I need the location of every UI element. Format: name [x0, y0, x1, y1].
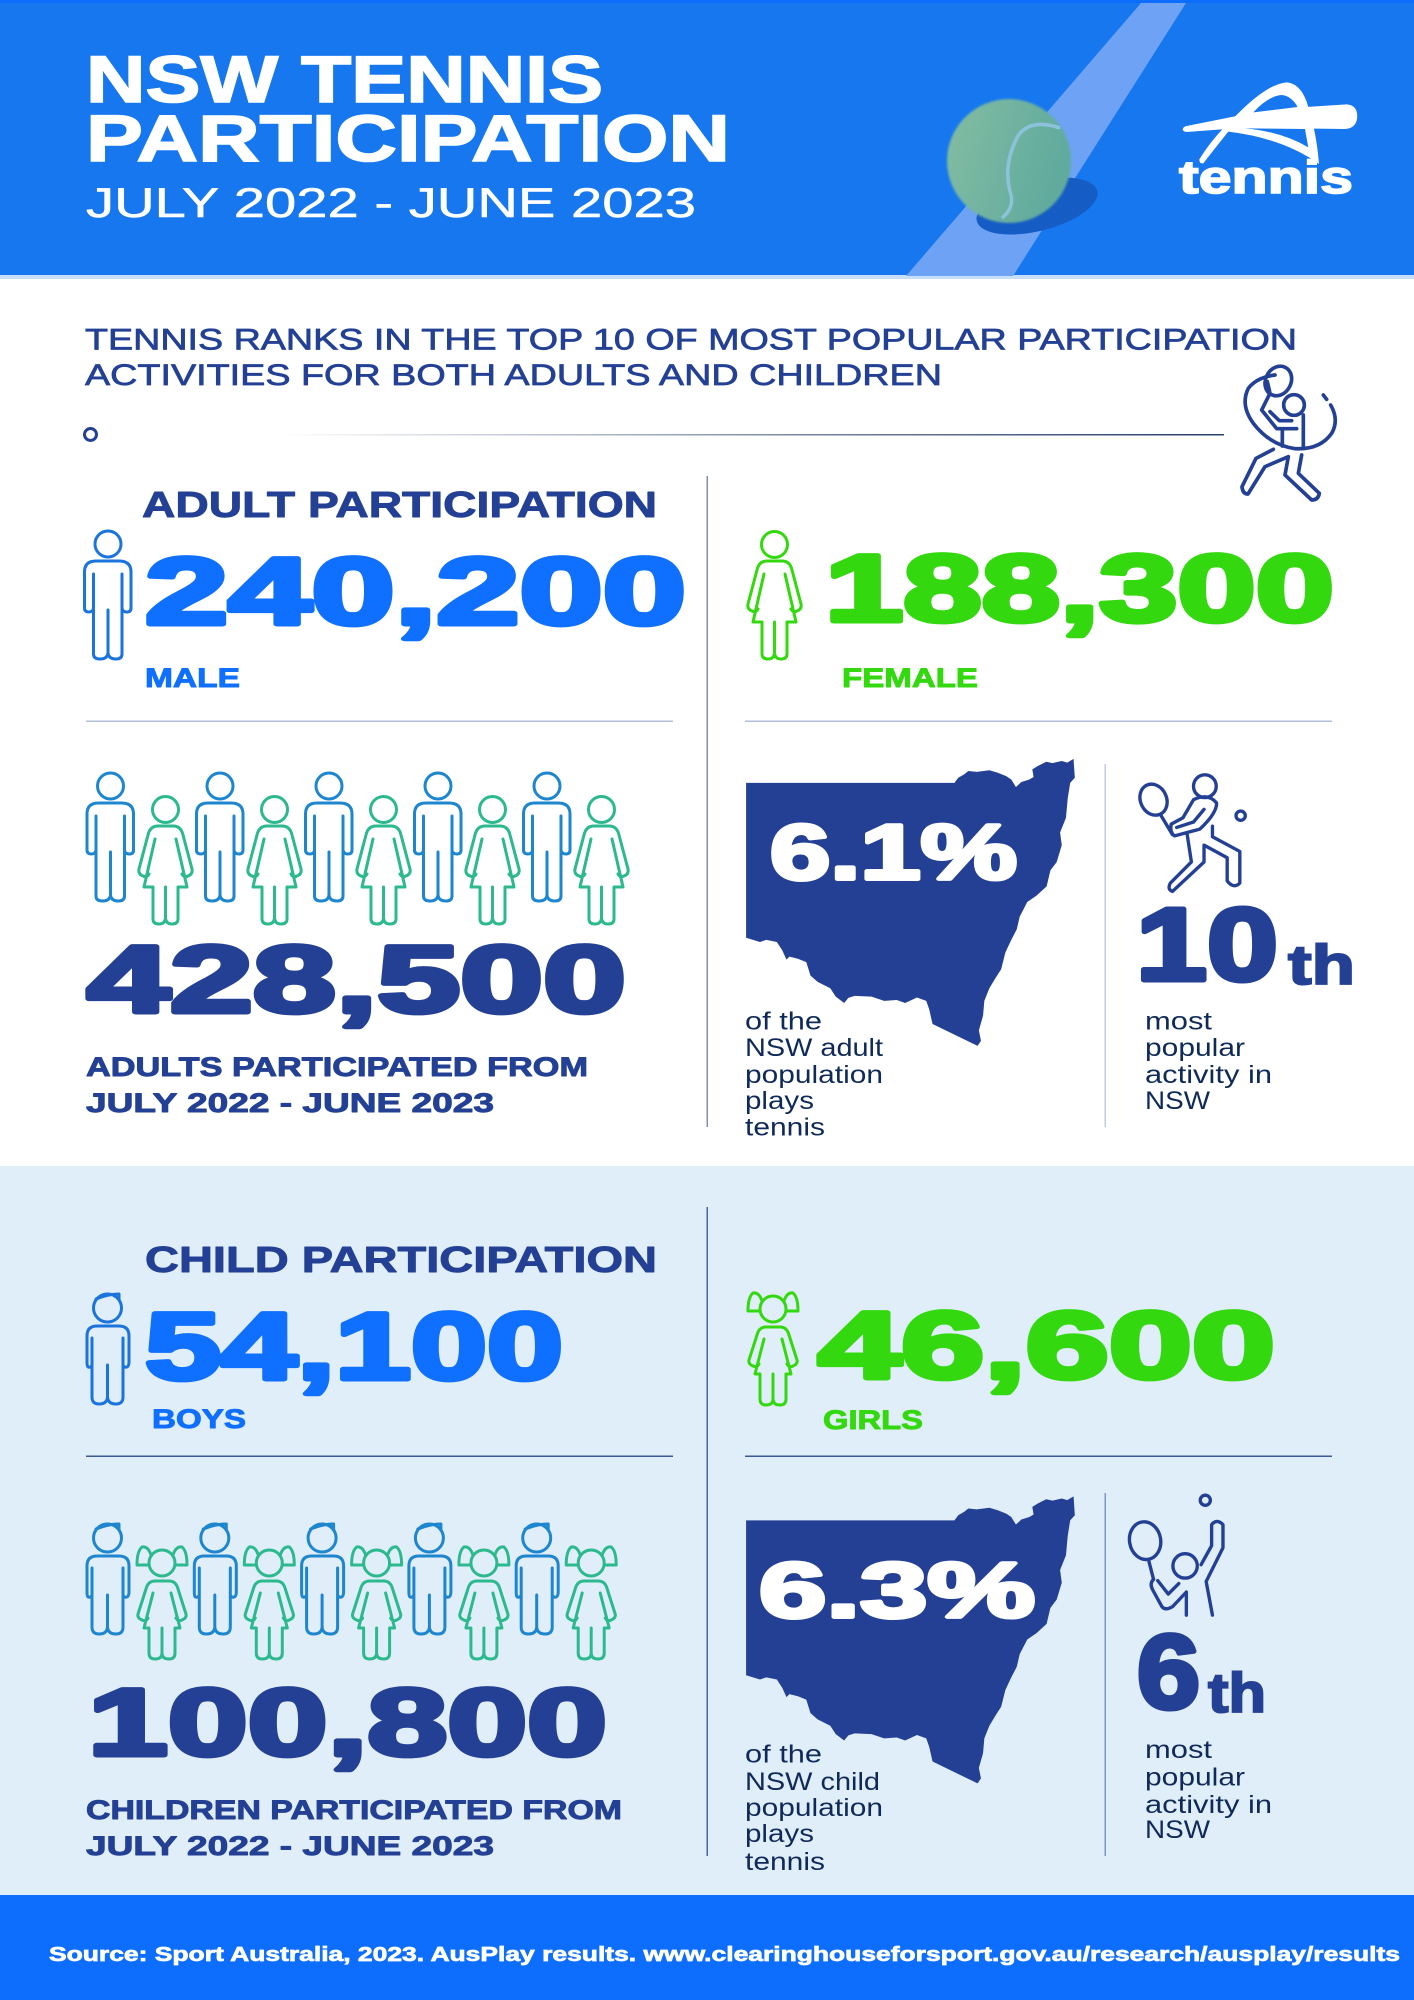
rank text: NSW — [1145, 1816, 1210, 1844]
footer — [0, 1895, 1414, 2000]
rank: 6th — [1137, 1614, 1266, 1731]
source line: Source: Sport Australia, 2023. AusPlay results. www.clearinghouseforsport.gov.au/research/ausplay/results — [49, 1944, 1400, 1966]
map: NSW child share — [746, 1496, 1075, 1783]
children caption — [86, 1795, 622, 1861]
heading: CHILD PARTICIPATION — [145, 1239, 657, 1280]
rank text — [1145, 1008, 1272, 1115]
ball shadow — [971, 167, 1103, 245]
icon: boy — [87, 1294, 129, 1404]
girls count: 46,600 — [818, 1293, 1275, 1399]
icon row: adults — [87, 773, 628, 924]
title: NSW TENNIS — [86, 42, 603, 116]
rank text: popular — [1145, 1764, 1245, 1792]
child share text: population — [745, 1794, 883, 1822]
rank: 10th: th — [1288, 933, 1355, 996]
rank text — [1145, 1736, 1272, 1844]
title: PARTICIPATION — [86, 101, 730, 175]
rank: 10th: 10 — [1136, 887, 1278, 1002]
male count: 240,200 — [145, 539, 686, 645]
adult share text — [745, 1008, 883, 1142]
adult share text: tennis — [745, 1114, 825, 1142]
adults caption: JULY 2022 - JUNE 2023 — [86, 1088, 494, 1118]
subtitle dates: JULY 2022 - JUNE 2023 — [86, 179, 696, 226]
rank: 6th: th — [1208, 1661, 1266, 1724]
rank text: activity in — [1145, 1791, 1272, 1819]
total children: 100,800 — [88, 1670, 607, 1776]
female label: FEMALE — [842, 663, 978, 693]
panel: adult participation — [84, 484, 1355, 1142]
intro statement: ACTIVITIES FOR BOTH ADULTS AND CHILDREN — [85, 359, 942, 392]
adults caption: ADULTS PARTICIPATED FROM — [86, 1052, 588, 1082]
tennis ball — [947, 99, 1071, 223]
boys count: 54,100 — [145, 1294, 563, 1400]
court line — [906, 3, 1186, 276]
map: NSW child share: 6.3% — [759, 1546, 1035, 1634]
adult share text: NSW adult — [745, 1034, 883, 1062]
girls label: GIRLS — [823, 1405, 923, 1435]
intro statement — [85, 324, 1297, 392]
icon row: children — [87, 1524, 616, 1659]
icon: male — [84, 531, 131, 659]
map: NSW adult share — [746, 759, 1075, 1046]
rank text: most — [1145, 1008, 1212, 1036]
header banner — [0, 0, 1414, 279]
intro statement: TENNIS RANKS IN THE TOP 10 OF MOST POPULAR PARTICIPATION — [85, 324, 1297, 356]
rank text: activity in — [1145, 1061, 1272, 1089]
child share text: NSW child — [745, 1768, 880, 1796]
children caption: CHILDREN PARTICIPATED FROM — [86, 1795, 622, 1825]
rank text: most — [1145, 1736, 1212, 1764]
heading: ADULT PARTICIPATION — [142, 484, 657, 525]
children caption: JULY 2022 - JUNE 2023 — [86, 1831, 494, 1861]
child share text: of the — [745, 1740, 822, 1768]
male label: MALE — [145, 663, 240, 693]
logo: tennis — [1179, 82, 1357, 203]
child share text: tennis — [745, 1848, 825, 1876]
rank text: popular — [1145, 1034, 1245, 1062]
title — [86, 42, 730, 175]
rank: 6th: 6 — [1137, 1614, 1200, 1731]
logo: tennis: tennis — [1179, 151, 1353, 203]
panel: child participation — [0, 1166, 1414, 1895]
adult share text: of the — [745, 1008, 822, 1036]
adults caption — [86, 1052, 588, 1118]
icon: girl — [748, 1293, 798, 1405]
total adults: 428,500 — [87, 927, 626, 1033]
map: NSW adult share: 6.1% — [770, 808, 1017, 896]
female count: 188,300 — [825, 536, 1334, 642]
child share text: plays — [745, 1820, 814, 1848]
icon: female — [748, 532, 801, 659]
rank: 10th — [1136, 887, 1355, 1002]
boys label: BOYS — [152, 1404, 246, 1434]
icon: child with racket — [1126, 1495, 1223, 1615]
icon: forehand player — [1135, 775, 1245, 891]
ball marker — [84, 428, 96, 440]
adult share text: population — [745, 1061, 883, 1089]
adult share text: plays — [745, 1087, 814, 1115]
rank text: NSW — [1145, 1087, 1210, 1115]
child share text — [745, 1740, 883, 1876]
icon: tennis player serving — [1242, 362, 1335, 500]
